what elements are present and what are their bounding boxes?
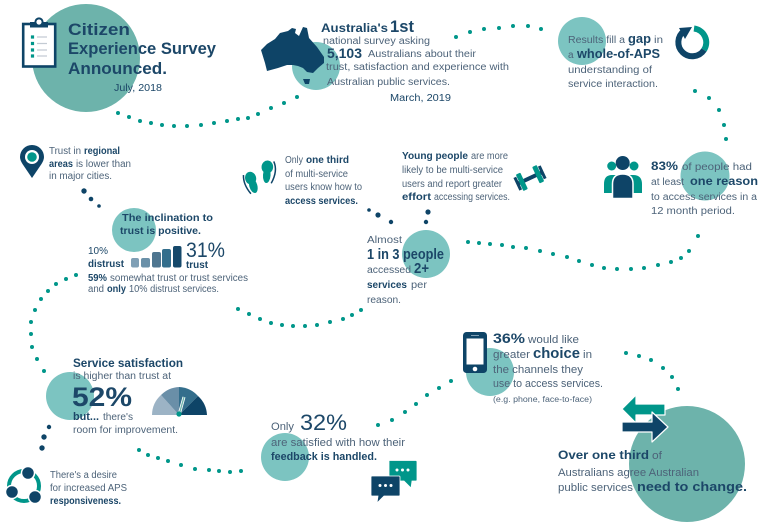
text block: is higher than trust at [73,371,171,382]
text block: effort [402,192,432,203]
text block: in [654,35,663,46]
text block: but... [73,411,99,423]
text block: greater [493,349,530,361]
icon: network cycle [6,466,42,504]
text block: at least [651,177,684,188]
text block [49,146,131,182]
text block: Australians agree Australian [558,467,699,479]
text block: 1st [390,17,414,36]
text block: accessed [367,265,411,276]
text block: Only [285,155,303,166]
text block: room for improvement. [73,425,178,436]
text block [568,31,663,90]
icon: location pin [20,145,44,178]
panel: 36% would like greater choice [463,330,603,404]
icon: clipboard [23,18,55,66]
icon: gauge [152,387,207,417]
text block: public services [558,482,634,494]
label: 31% trust: 31% [186,239,225,262]
text block: likely to be multi-service [402,165,503,176]
text block [493,330,603,404]
text block: in major cities. [49,171,112,182]
icon: map of Australia [261,27,324,84]
bar chart [131,246,182,268]
panel: service satisfaction [46,358,207,436]
icon: people group [604,156,642,198]
text block: somewhat trust or trust services [110,273,248,284]
text block: only [107,284,126,295]
text block [367,235,444,306]
text block: 36% [493,330,526,346]
panel: 83% of people [604,152,758,217]
text block: 12 month period. [651,206,735,217]
label: 10% distrust [88,246,125,270]
panel: over one third need to change [558,395,747,522]
text block: Australians about their [368,49,477,60]
text block: 83% [651,159,678,173]
text block [50,470,127,507]
text block: Over one third [558,448,649,462]
text block: need to change. [637,480,747,494]
text block [402,151,510,203]
text block: 2+ [414,260,429,277]
text block: use to access services. [493,378,603,390]
text block: are more [471,151,508,162]
text block: is lower than [76,159,131,170]
text block: national survey asking [323,36,430,47]
text block: 5,103 [327,45,362,61]
text block: of people had [682,162,752,173]
label: 10% distrust: distrust [88,259,125,270]
text block: Trust in [49,146,81,157]
panel: only 32% satisfied [261,410,417,503]
label: 10% distrust: 10% [88,246,108,257]
panel: inclination to trust [88,208,248,295]
title: Experience Survey [68,39,217,58]
text block: 32% [300,410,347,435]
heading: The inclination to [122,212,213,224]
text block: to access services in a [651,192,757,203]
heading: trust is positive. [120,225,201,237]
text block: per [411,280,428,291]
icon: cycle arrow [678,27,706,56]
icon: footprints [242,160,276,195]
text block: 59% [88,273,107,284]
text block: access services. [285,196,358,207]
text block: accessing services. [434,192,510,203]
panel: regional trust [20,145,131,182]
text block: a [568,50,574,61]
text block: for increased APS [50,483,127,494]
text block [651,159,758,217]
text block: There's a desire [50,470,117,481]
text block: trust, satisfaction and experience with [326,62,509,73]
icon: smartphone [463,332,487,373]
text block: services [367,280,407,291]
text block [271,410,405,463]
text block: and [88,284,104,295]
text block: choice [533,345,580,362]
text block [285,155,362,207]
text block: Only [271,421,295,433]
panel: citizen experience survey announced [23,4,217,112]
panel: Australia's first national survey [261,17,509,104]
text block: one reason [690,176,758,188]
text block: Almost [367,235,402,246]
panel: one third know how to access [242,155,362,207]
text block: 52% [72,382,132,412]
panel: young people [402,151,547,203]
text block: users and report greater [402,179,503,190]
text block: of [652,450,663,462]
label: 31% trust: trust [186,260,209,271]
text block: March, 2019 [390,93,451,104]
text block: understanding of [568,65,652,76]
icon: dumbbell [513,164,547,192]
panel: results fill a gap [558,17,706,90]
text block: 1 in 3 people [367,246,444,263]
title: Announced. [68,59,167,78]
title: Citizen [68,20,130,39]
label: 31% trust [186,239,225,271]
text block: Australia's [321,21,388,35]
text block: feedback is handled. [271,451,377,463]
panel: 1 in 3 people [367,230,450,306]
icon: exchange arrows [622,395,668,442]
panel: APS responsiveness [6,466,127,507]
text block: (e.g. phone, face-to-face) [493,395,592,404]
text block: users know how to [285,182,362,193]
text block: Results fill a [568,35,625,46]
text block: 10% distrust services. [129,284,219,295]
text block: regional [84,146,120,157]
date: July, 2018 [114,83,162,94]
icon: chat bubbles [371,460,417,503]
text block: are satisfied with how their [271,437,405,449]
text block: there's [103,412,133,423]
text block: Service satisfaction [73,358,183,370]
text block: service interaction. [568,79,658,90]
dotted path: navy connectors [39,188,431,451]
text block: reason. [367,295,401,306]
text block: of multi-service [285,169,348,180]
text block: the channels they [493,364,584,376]
title [68,20,217,78]
text block: Young people [402,151,468,162]
text block [72,358,183,436]
text block: areas [49,159,73,170]
text block: whole-of-APS [576,46,660,61]
text block [88,273,248,295]
text block: Australian public services. [327,77,450,88]
heading [120,212,213,237]
text block: gap [628,31,651,46]
dotted path: teal connectors [31,26,726,472]
text block: responsiveness. [50,496,121,507]
text block [321,17,509,104]
text block: one third [306,155,349,166]
text block: in [583,349,592,361]
text block: would like [527,334,579,346]
text block [558,448,747,494]
